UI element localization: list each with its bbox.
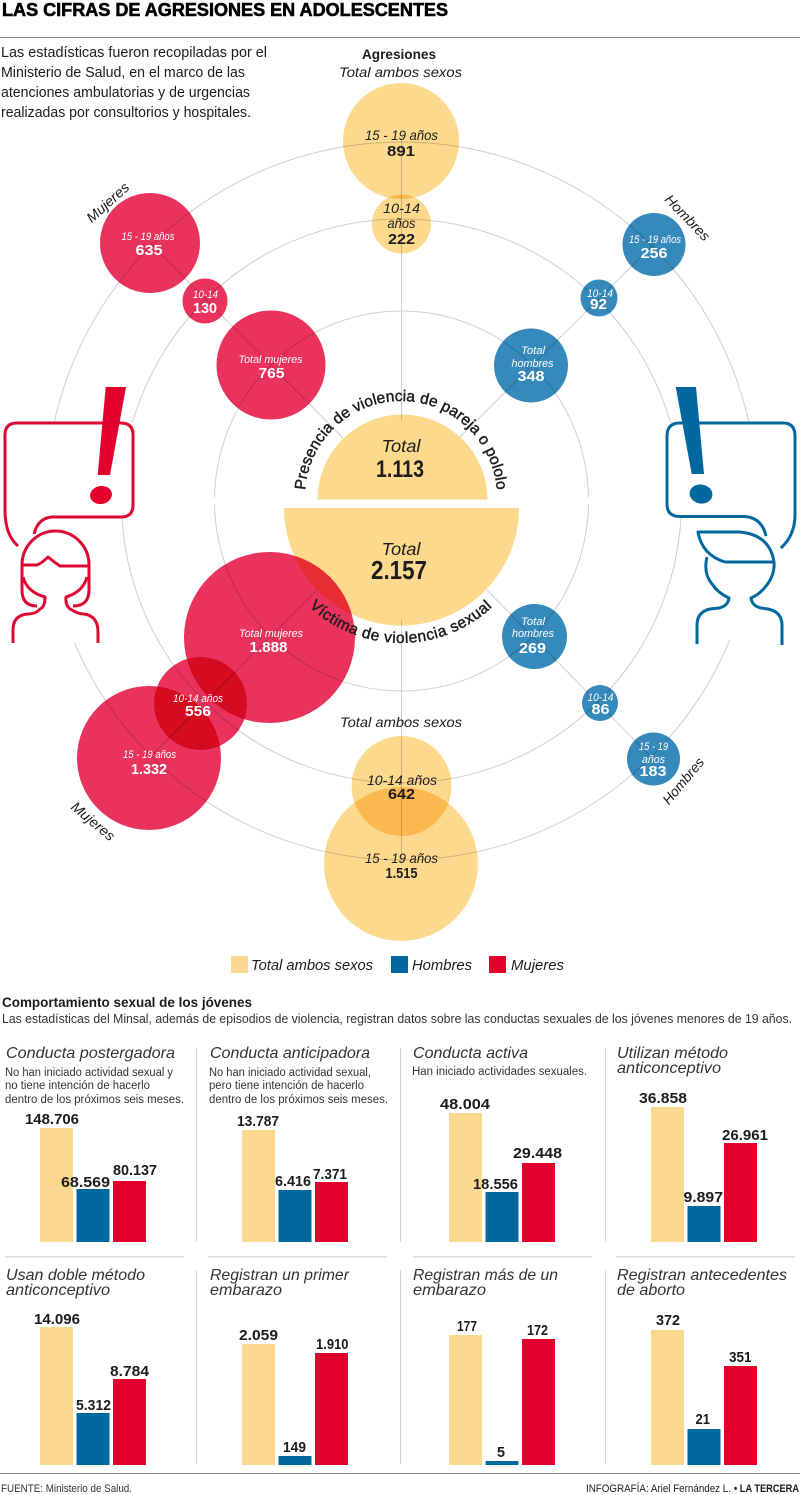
panel: conducta postergadora: 80.137 [113, 1162, 157, 1179]
labels: hombres 256: 256 [640, 245, 668, 262]
icon: man with alert speech bubble [667, 387, 800, 645]
panel: conducta activa [412, 1045, 587, 1242]
labels: 10-14 años 642: 642 [388, 786, 415, 803]
central half circle: pareja total [318, 414, 488, 500]
panel: registran más de un embarazo [413, 1267, 558, 1465]
panel: utilizan método anticonceptivo [617, 1045, 768, 1242]
radial chart guide rings and spokes [46, 141, 758, 862]
labels: hombres 86: 86 [592, 701, 610, 718]
intro text: Las estadísticas fueron recopiladas por el [1, 45, 267, 61]
panel: conducta anticipadora: No han iniciado actividad sexual, [209, 1067, 371, 1079]
label: total 1.113: Total [382, 436, 422, 456]
labels: 15-19 años 891: 15 - 19 años [365, 127, 438, 143]
label: total 1.113: 1.113 [376, 456, 424, 483]
section heading: Comportamiento sexual de los jóvenes [2, 994, 252, 1010]
labels: total hombres 348: Total [521, 345, 546, 357]
labels: 10-14 años 642: 10-14 años [367, 772, 437, 788]
panel: utilizan método anticonceptivo: 36.858 [639, 1090, 687, 1107]
labels: total mujeres 1.888 [239, 628, 303, 656]
labels: total hombres 269 [512, 616, 554, 657]
panel: registran antecedentes de aborto: de aborto [617, 1282, 685, 1299]
panel: registran más de un embarazo: 177 [457, 1318, 477, 1335]
panel: conducta postergadora: no tiene intención de hacerlo [5, 1080, 150, 1092]
panel: utilizan método anticonceptivo: 9.897 [684, 1189, 723, 1206]
panel: conducta postergadora: dentro de los próximos seis meses. [5, 1094, 184, 1106]
label: Mujeres bottom: Mujeres [68, 798, 118, 844]
heading: agresiones: Total ambos sexos [339, 64, 462, 80]
panel: conducta postergadora: No han iniciado actividad sexual y [5, 1067, 173, 1079]
circles: mujeres violencia sexual [77, 552, 355, 830]
labels: mujeres 130: 130 [193, 300, 217, 317]
panel: registran más de un embarazo: embarazo [413, 1282, 486, 1299]
panel: registran un primer embarazo: embarazo [210, 1282, 282, 1299]
label: total 2.157: Total [382, 539, 422, 559]
labels: 15-19 años 891 [365, 127, 438, 160]
panel: conducta postergadora: 68.569 [61, 1174, 110, 1191]
labels: mujeres 130: 10-14 [193, 289, 218, 301]
panel: usan doble método anticonceptivo [6, 1267, 150, 1465]
panel: conducta postergadora [5, 1045, 184, 1242]
labels: 10-14 años 222: 10-14 [383, 200, 420, 216]
intro text: atenciones ambulatorias y de urgencias [1, 85, 250, 101]
panel: conducta anticipadora: pero tiene intención de hacerlo [209, 1080, 364, 1092]
labels: mujeres 635 [122, 231, 175, 259]
circles: total ambos sexos agresiones [343, 83, 459, 254]
labels: mujeres 15-19 años 1.332: 1.332 [131, 761, 167, 778]
labels: total mujeres 765 [238, 354, 303, 382]
label: total 2.157: 2.157 [371, 555, 427, 585]
panel: conducta activa: 48.004 [440, 1096, 491, 1113]
panel: conducta postergadora: 148.706 [25, 1111, 79, 1128]
curved label: Víctima de violencia sexual: Víctima de violencia sexual [312, 598, 492, 644]
labels: 15-19 años 1.515: 15 - 19 años [365, 850, 438, 866]
panel: conducta anticipadora: dentro de los próximos seis meses. [209, 1094, 388, 1106]
panel: utilizan método anticonceptivo: Utilizan método [617, 1045, 728, 1062]
intro text: realizadas por consultorios y hospitales. [1, 105, 251, 121]
labels: 10-14 años 642 [367, 772, 437, 803]
label: Hombres bottom: Hombres [659, 754, 707, 807]
labels: total hombres 269: Total [521, 616, 546, 628]
panel: registran un primer embarazo [210, 1267, 350, 1465]
panel: registran antecedentes de aborto: 21 [696, 1411, 710, 1428]
circles: mujeres agresiones [100, 193, 326, 420]
label: total 1.113 [376, 436, 424, 483]
labels: hombres 183: 183 [640, 763, 666, 780]
labels: hombres 92: 92 [590, 296, 607, 313]
panel: usan doble método anticonceptivo: 8.784 [110, 1363, 150, 1380]
panel: conducta activa: Conducta activa [413, 1045, 528, 1062]
labels: mujeres 635: 635 [136, 242, 162, 259]
labels: mujeres 15-19 años 1.332: 15 - 19 años [123, 749, 176, 761]
panel: conducta anticipadora: 7.371 [313, 1166, 347, 1183]
label: Mujeres top: Mujeres [83, 179, 132, 226]
intro text [1, 45, 267, 121]
labels: hombres 256: 15 - 19 años [629, 234, 681, 246]
panel: conducta anticipadora: 6.416 [275, 1173, 311, 1190]
panel: utilizan método anticonceptivo: 26.961 [722, 1127, 768, 1144]
panel: conducta anticipadora: Conducta anticipadora [210, 1045, 370, 1062]
panel: registran un primer embarazo: 1.910 [316, 1336, 348, 1353]
panel: usan doble método anticonceptivo: 14.096 [34, 1311, 80, 1328]
labels: 10-14 años 222: años [388, 215, 416, 231]
panel: usan doble método anticonceptivo: 5.312 [76, 1397, 111, 1414]
legend [231, 956, 564, 974]
legend: Total ambos sexos [251, 958, 373, 974]
source note: FUENTE: Ministerio de Salud. [1, 1483, 132, 1495]
curved label: Presencia de violencia de pareja o pololo: Presencia de violencia de pareja o pololo [294, 390, 507, 490]
labels: total hombres 269: hombres [512, 628, 554, 640]
panel: conducta anticipadora: 13.787 [237, 1113, 279, 1130]
labels: hombres 92 [587, 288, 613, 313]
panel: registran un primer embarazo: 149 [283, 1439, 306, 1456]
panel: conducta postergadora: Conducta postergadora [6, 1045, 175, 1062]
panel: registran antecedentes de aborto [617, 1267, 787, 1465]
labels: hombres 92: 10-14 [587, 288, 613, 300]
label: Total ambos sexos bottom: Total ambos sexos [340, 714, 462, 730]
labels: 10-14 años 222 [383, 200, 420, 248]
labels: hombres 183: años [642, 754, 665, 766]
label: total 2.157 [371, 539, 427, 585]
panel: registran más de un embarazo: Registran más de un [413, 1267, 558, 1284]
circles: hombres violencia sexual [502, 604, 680, 786]
legend: Mujeres [511, 958, 564, 974]
labels: total hombres 269: 269 [519, 640, 546, 657]
labels: mujeres 10-14 años 556: 10-14 años [173, 693, 223, 705]
panel: conducta activa: Han iniciado actividades sexuales. [412, 1066, 587, 1078]
labels: total hombres 348 [512, 345, 554, 385]
labels: total mujeres 765: 765 [258, 365, 284, 382]
panel: registran un primer embarazo: Registran un primer [210, 1267, 350, 1284]
labels: hombres 256 [629, 234, 681, 262]
panel: usan doble método anticonceptivo: Usan doble método [6, 1267, 145, 1284]
label: Hombres top: Hombres [662, 191, 713, 244]
panel: conducta anticipadora [209, 1045, 388, 1242]
panel: conducta activa: 18.556 [473, 1176, 518, 1193]
labels: hombres 183: 15 - 19 [639, 741, 668, 753]
panel: registran más de un embarazo: 5 [497, 1444, 505, 1461]
labels: total hombres 348: 348 [518, 368, 544, 385]
legend: Hombres [412, 958, 472, 974]
circles: total ambos sexos violencia sexual [324, 736, 478, 941]
labels: total mujeres 765: Total mujeres [238, 354, 303, 366]
panel: registran antecedentes de aborto: 372 [656, 1312, 680, 1329]
labels: mujeres 10-14 años 556 [173, 693, 223, 720]
heading: agresiones [339, 47, 462, 80]
circles: hombres agresiones [494, 213, 686, 402]
labels: hombres 86 [588, 692, 614, 718]
labels: total hombres 348: hombres [512, 358, 554, 370]
icon: woman with alert speech bubble [0, 387, 133, 643]
panel: registran un primer embarazo: 2.059 [239, 1327, 278, 1344]
labels: total mujeres 1.888: Total mujeres [239, 628, 303, 640]
labels: mujeres 635: 15 - 19 años [122, 231, 175, 243]
labels: 15-19 años 1.515: 1.515 [386, 865, 418, 882]
labels: mujeres 15-19 años 1.332 [123, 749, 176, 778]
credit: INFOGRAFÍA: Ariel Fernández L. [586, 1482, 731, 1495]
intro text: Ministerio de Salud, en el marco de las [1, 65, 245, 81]
panel: usan doble método anticonceptivo: anticonceptivo [6, 1282, 110, 1299]
section description: Las estadísticas del Minsal, además de episodios de violencia, registran datos sobre las conductas sexuales de los jóvenes menores de 19 años. [2, 1012, 792, 1026]
panel: registran más de un embarazo: 172 [527, 1322, 548, 1339]
labels: 15-19 años 1.515 [365, 850, 438, 882]
labels: hombres 86: 10-14 [588, 692, 614, 704]
central half circle: violencia sexual total [284, 508, 519, 626]
labels: hombres 183 [639, 741, 668, 780]
labels: mujeres 130 [193, 289, 218, 317]
heading: agresiones: Agresiones [362, 47, 436, 62]
labels: mujeres 10-14 años 556: 556 [185, 703, 211, 720]
panel: conducta activa: 29.448 [513, 1145, 562, 1162]
panel: utilizan método anticonceptivo: anticonceptivo [617, 1060, 721, 1077]
panel: registran antecedentes de aborto: Registran antecedentes [617, 1267, 787, 1284]
panel: registran antecedentes de aborto: 351 [729, 1349, 752, 1366]
labels: total mujeres 1.888: 1.888 [250, 639, 288, 656]
labels: 15-19 años 891: 891 [387, 143, 415, 160]
panel dividers [5, 1048, 795, 1464]
labels: 10-14 años 222: 222 [388, 231, 415, 248]
